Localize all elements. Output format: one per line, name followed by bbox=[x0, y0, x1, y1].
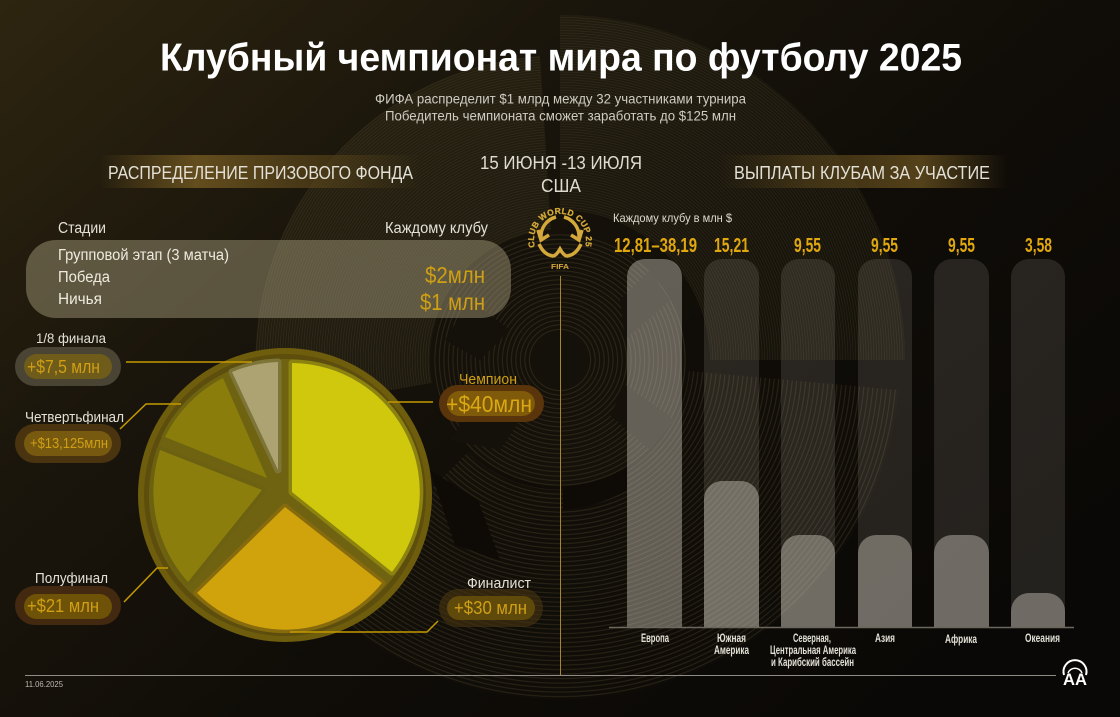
heading: club payouts bbox=[721, 155, 1007, 188]
chart caption: Каждому клубу в млн $ bbox=[613, 211, 732, 225]
callout: round of 16 bbox=[15, 330, 252, 386]
pie chart bbox=[138, 348, 432, 642]
callout: semifinal bbox=[15, 568, 168, 625]
footer rule bbox=[25, 674, 1056, 676]
bar labels: Южная bbox=[717, 631, 746, 645]
heading: prize distribution: РАСПРЕДЕЛЕНИЕ ПРИЗОВОГО ФОНДА bbox=[108, 162, 414, 183]
bar numbers: 3,58 bbox=[1025, 235, 1052, 257]
date and place: США bbox=[541, 175, 582, 196]
column headers: Стадии bbox=[58, 220, 106, 237]
bar labels: Океания bbox=[1025, 631, 1060, 645]
group stage values bbox=[420, 262, 485, 315]
group stage row labels: Победа bbox=[58, 269, 110, 286]
bar values bbox=[627, 259, 1065, 627]
slice: semifinal bbox=[153, 450, 262, 582]
callout: semifinal: +$21 млн bbox=[27, 595, 99, 616]
group stage row labels bbox=[58, 247, 229, 308]
bar labels: и Карибский бассейн bbox=[771, 655, 854, 669]
date and place: 15 ИЮНЯ -13 ИЮЛЯ bbox=[480, 152, 642, 173]
callout: finalist: +$30 млн bbox=[454, 598, 527, 618]
bar labels bbox=[641, 631, 1060, 669]
column headers: Каждому клубу bbox=[385, 220, 488, 237]
bar chart: payouts by confederation bbox=[609, 235, 1074, 669]
bar numbers bbox=[614, 235, 1052, 257]
subtitle: Победитель чемпионата сможет заработать до $125 млн bbox=[385, 108, 736, 124]
bar numbers: 12,81–38,19 bbox=[614, 235, 697, 257]
callout: champion: Чемпион bbox=[459, 371, 517, 388]
callout: finalist: Финалист bbox=[467, 575, 531, 592]
bar labels: Европа bbox=[641, 631, 669, 645]
callout: round of 16: 1/8 финала bbox=[36, 330, 106, 346]
callout: semifinal: Полуфинал bbox=[35, 570, 108, 587]
centre divider line bbox=[560, 276, 562, 676]
icon: AA agency logo bbox=[1063, 660, 1087, 689]
callout: champion bbox=[388, 371, 544, 422]
bar tracks bbox=[704, 259, 1065, 627]
heading: club payouts: ВЫПЛАТЫ КЛУБАМ ЗА УЧАСТИЕ bbox=[734, 162, 990, 183]
slice: quarterfinal bbox=[165, 378, 267, 478]
bar labels: Северная, bbox=[793, 631, 831, 645]
date and place bbox=[480, 152, 642, 196]
decorative concentric rings bbox=[255, 15, 905, 700]
callout: quarterfinal bbox=[15, 404, 181, 463]
slice: champion bbox=[292, 363, 420, 572]
bar labels: Африка bbox=[945, 632, 977, 646]
subtitle: ФИФА распределит $1 млрд между 32 участниками турнира bbox=[375, 90, 746, 106]
panel: group stage table bbox=[26, 220, 511, 318]
bar numbers: 9,55 bbox=[794, 235, 821, 257]
title: Клубный чемпионат мира по футболу 2025 bbox=[160, 36, 962, 80]
bar labels: Центральная Америка bbox=[770, 643, 856, 657]
group stage values: $2млн bbox=[425, 262, 485, 288]
group stage row labels: Ничья bbox=[58, 291, 102, 308]
bar numbers: 9,55 bbox=[871, 235, 898, 257]
callout: quarterfinal: Четвертьфинал bbox=[25, 410, 124, 426]
callout: round of 16: +$7,5 млн bbox=[27, 357, 100, 377]
bar numbers: 9,55 bbox=[948, 235, 975, 257]
icon: club world cup logo: CLUB WORLD CUP 25 bbox=[528, 208, 592, 248]
group stage row labels: Групповой этап (3 матча) bbox=[58, 247, 229, 264]
callout: finalist bbox=[290, 575, 543, 632]
column headers bbox=[58, 220, 488, 237]
group stage values: $1 млн bbox=[420, 289, 485, 315]
date stamp: 11.06.2025 bbox=[25, 679, 63, 689]
icon: AA agency logo: AA bbox=[1063, 670, 1087, 689]
heading: prize distribution bbox=[100, 155, 421, 188]
bar labels: Азия bbox=[875, 631, 895, 645]
icon: club world cup logo: FIFA bbox=[551, 262, 570, 271]
slice: round of 16 bbox=[232, 362, 278, 470]
bar labels: Америка bbox=[714, 643, 749, 657]
slice: finalist bbox=[197, 507, 382, 630]
callout: champion: +$40млн bbox=[446, 391, 532, 417]
bar numbers: 15,21 bbox=[714, 235, 749, 257]
callout: quarterfinal: +$13,125млн bbox=[30, 436, 108, 452]
icon: club world cup logo bbox=[528, 208, 592, 271]
subtitle bbox=[375, 90, 746, 124]
